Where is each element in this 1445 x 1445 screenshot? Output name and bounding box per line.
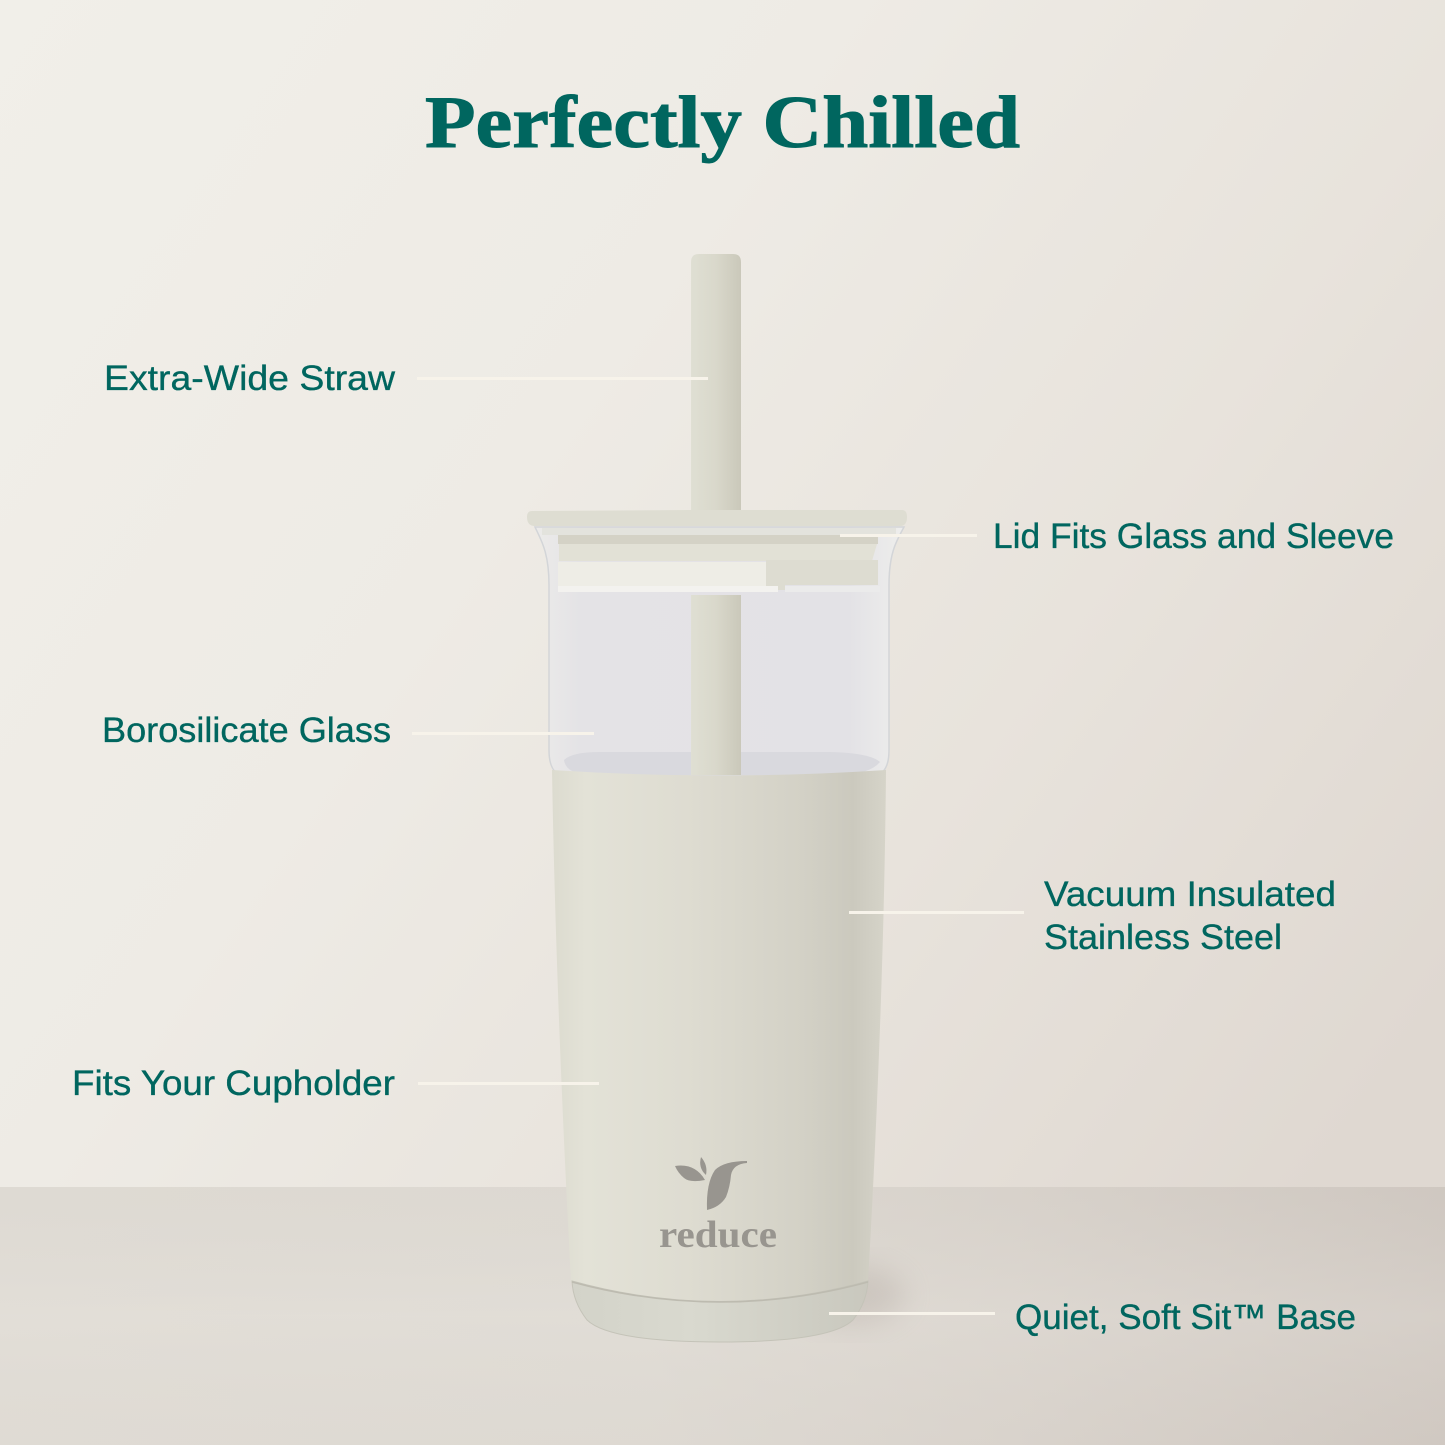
lid top [527,510,907,526]
logo wordmark: reduce [659,1214,777,1256]
cast shadow [795,1265,905,1325]
background floor [0,1187,1445,1445]
logo: reduce [659,1157,777,1256]
base seam [572,1282,868,1302]
tumbler product illustration [527,254,907,1342]
callout: lid fits glass and sleeve: Lid Fits Glass and Sleeve [993,517,1394,556]
callout: vacuum insulated stainless steel: Stainless Steel [1044,918,1282,957]
callout: fits your cupholder [72,1064,599,1103]
straw lower inside glass [691,595,741,775]
callout: extra-wide straw: Extra-Wide Straw [104,359,396,398]
insulated sleeve [552,770,886,1301]
glass cup [535,527,904,776]
callout: quiet soft sit base [829,1298,1356,1337]
straw upper [691,254,741,516]
lid underside seal [542,528,896,592]
callout: extra-wide straw [104,359,708,398]
soft base [572,1281,868,1342]
callout: fits your cupholder: Fits Your Cupholder [72,1064,395,1103]
logo leaf mark [675,1157,747,1210]
callout: borosilicate glass: Borosilicate Glass [102,711,391,750]
callout: borosilicate glass [102,711,594,750]
title: Perfectly Chilled [425,82,1020,164]
callout: quiet soft sit base: Quiet, Soft Sit™ Base [1015,1298,1356,1337]
callout: vacuum insulated stainless steel [849,875,1336,957]
callout: vacuum insulated stainless steel: Vacuum Insulated [1044,875,1336,914]
